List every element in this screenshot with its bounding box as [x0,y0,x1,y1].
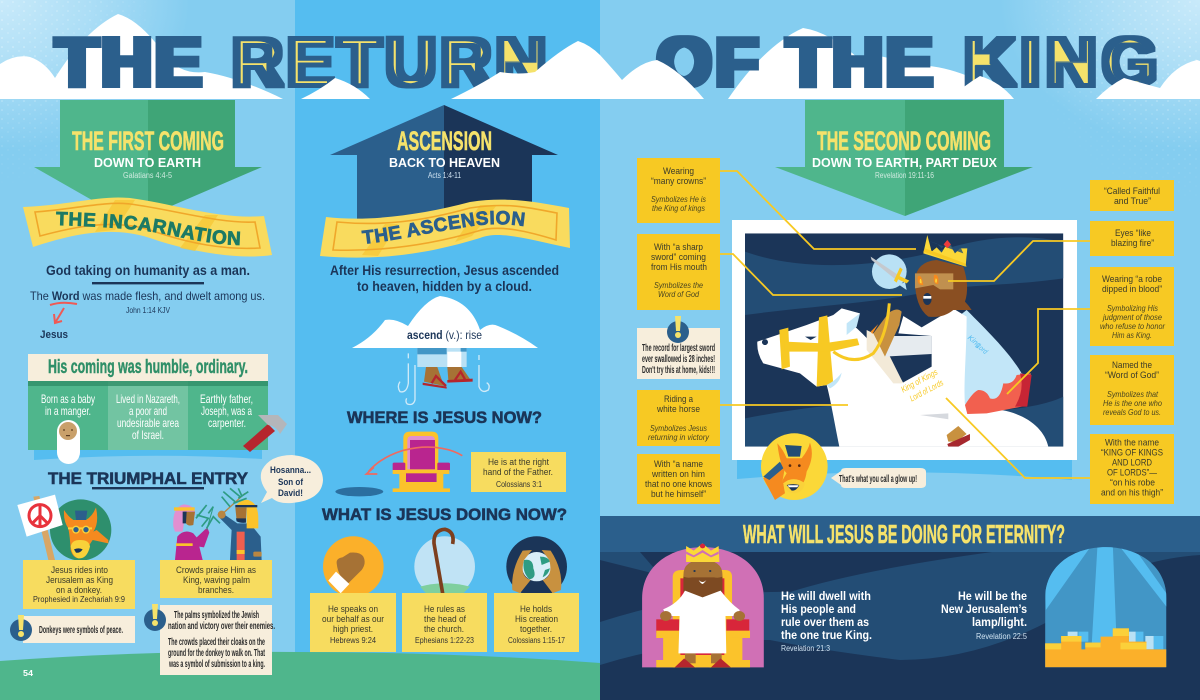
arrow: green down arrow [34,100,262,232]
callout: sharp sword: Word of God [658,289,699,299]
callout: king of kings: “on his robe [1110,478,1155,488]
callout: robe dipped in blood: dipped in blood” [1102,284,1162,295]
text: after his resurrection: to heaven, hidden by a cloud. [357,278,532,294]
text: dwell with his people: His people and [781,604,856,616]
callout: white horse [637,390,720,446]
panel: first coming [10,100,287,678]
arrow: navy up arrow [330,105,558,230]
illustration: jesus on white horse: Lord [975,341,990,356]
illustration: jesus on white horse [745,233,1063,500]
note: donkeys symbols of peace: Donkeys were symbols of peace. [39,625,123,636]
note: largest sword swallowed [637,316,720,379]
callout: king of kings: and on his thigh” [1101,488,1163,498]
text: new jerusalem lamp: lamp/light. [972,617,1027,629]
title: OF [657,23,762,101]
panel: second coming [637,100,1174,504]
text box: holds creation [494,593,579,652]
frame: white picture frame [732,220,1077,460]
ribbon: the ascension [320,200,570,258]
note: palms symbolized: nation and victory over their enemies. [168,621,275,632]
subheading: back to heaven: BACK TO HEAVEN [389,155,500,170]
reference: revelation: Revelation 19:11-16 [875,171,934,180]
dark background with waves [600,516,1200,700]
callout: faithful and true: and True” [1114,196,1151,207]
callout: many crowns: Wearing [663,166,694,177]
callout: white horse: returning in victory [648,432,710,442]
text box: head of the church: He rules as [424,604,465,615]
callout: many crowns: the King of kings [652,203,706,213]
text: dwell with his people [781,591,872,653]
callout: sharp sword: Symbolizes the [654,280,703,290]
text box: jesus rides into jerusalem: Jesus rides into [51,565,108,576]
text: god taking on humanity: God taking on humanity as a man. [46,262,250,278]
ribbon: the ascension: THE ASCENSION [361,210,525,244]
callout: many crowns: Symbolizes He is [651,194,707,204]
callout: word of god: He is the one who [1103,398,1162,408]
note: donkeys symbols of peace [10,615,135,643]
callout: robe dipped in blood: Symbolizing His [1107,303,1159,313]
text: new jerusalem lamp: Revelation 22:5 [976,632,1028,641]
text box: crowds praise him [160,560,272,598]
note: largest sword swallowed: The record for largest sword [642,343,715,354]
reference: john: John 1:14 KJV [126,306,171,315]
heading: the second coming: THE SECOND COMING [817,126,991,156]
label: jesus: Jesus [40,329,68,341]
panel: three humble facts: of Israel. [132,428,164,442]
ribbon: the incarnation: THE INCARNATION [56,212,240,246]
speech bubble: glow up [831,468,926,488]
callout: a name written: written on him [651,469,705,480]
clouds behind title [0,14,1013,99]
callout: sharp sword: With “a sharp [654,242,703,253]
icon: baby [57,420,80,464]
illustration: jesus on white horse: King of Kings [899,367,940,394]
text box: head of the church: the church. [424,624,464,635]
text: after his resurrection [330,262,559,294]
text box: crowds praise him: King, waving palm [183,575,250,586]
title: THE [787,23,936,101]
subheading: down to earth: DOWN TO EARTH [94,155,201,170]
callout: king of kings: “KING OF KINGS [1101,448,1163,458]
banner: humble ordinary: His coming was humble, ordinary. [48,357,248,378]
text box: high priest: high priest. [333,624,373,635]
callout: word of god [1090,355,1174,425]
panel: three humble facts: Lived in Nazareth, [116,392,180,406]
illustration: jesus on white horse: Lord of Lords [908,377,945,403]
callout: robe dipped in blood [1090,267,1174,346]
icon: small donkey [761,433,828,500]
callout: a name written [637,454,720,504]
callout: word of god: Named the [1112,360,1152,371]
text box: jesus rides into jerusalem [23,560,135,609]
speech bubble: hosanna [261,455,323,503]
banner: humble ordinary [28,354,268,381]
text: new jerusalem lamp [941,591,1028,641]
icon: throne with arrow [335,432,462,496]
illustration: feet below cloud [398,348,489,404]
note: palms symbolized: ground for the donkey to walk on. That [168,648,265,659]
blue shadow under frame [737,460,1072,480]
callout: robe dipped in blood: Wearing “a robe [1102,274,1162,285]
callout: word of god: “Word of God” [1105,370,1159,381]
text box: head of the church: Ephesians 1:22-23 [415,636,474,645]
panel: ascension [260,105,579,652]
callout: white horse: white horse [656,404,700,415]
panel: three humble facts: Born as a baby [41,392,95,406]
callout: many crowns [637,158,720,223]
speech bubble: hosanna: David! [278,488,303,498]
callout: king of kings: With the name [1105,438,1159,448]
text box: crowds praise him: Crowds praise Him as [176,565,256,576]
text box: holds creation: His creation [515,614,558,625]
arrow: red word to jesus [50,303,77,323]
title: THE [56,23,205,101]
cloud: ascend definition: ascend (v.): rise [407,328,482,342]
heading: ascension: ASCENSION [397,126,492,156]
text box: high priest: our behalf as our [322,614,384,625]
illustration: jesus on throne [642,543,764,667]
verse: the word: The Word was made flesh, and dwelt among us. [30,289,265,303]
text box: holds creation: He holds [520,604,552,615]
text box: right hand of father: hand of the Father. [483,467,553,478]
callout: blazing fire: Eyes “like [1115,228,1151,239]
panel: three humble facts: a poor and [129,404,167,418]
note: largest sword swallowed: ever swallowed is 28 inches! [642,354,715,365]
icon: donkey with peace sign [17,495,111,561]
panel: three humble facts: in a manger. [45,404,91,418]
text box: head of the church: the head of [424,614,466,625]
callout: king of kings: OF LORDS”— [1107,468,1157,478]
clouds in front of title [301,41,1200,99]
callout: blazing fire: blazing fire” [1111,238,1154,249]
callout: white horse: Symbolizes Jesus [650,423,708,433]
text box: head of the church [402,593,487,652]
callout: king of kings [1090,434,1174,504]
heading: what is jesus doing now: WHAT IS JESUS DOING NOW? [322,505,567,524]
panel: three humble facts: carpenter. [208,416,246,430]
text: new jerusalem lamp: He will be the [958,591,1027,603]
text box: jesus rides into jerusalem: Prophesied in Zechariah 9:9 [33,595,126,604]
title [56,23,1163,101]
page number: 54 [23,668,33,678]
text: after his resurrection: After His resurrection, Jesus ascended [330,262,559,278]
arrow: green down arrow [775,100,1033,216]
illustration: crowd with palm branches [173,488,262,560]
panel: three humble facts: Earthly father, [200,392,253,406]
text box: holds creation: together. [520,624,552,635]
illustration: jesus on white horse: King [966,333,984,350]
text: dwell with his people: He will dwell with [781,591,871,603]
text box: jesus rides into jerusalem: Jerusalem as King [46,575,113,586]
speech bubble: hosanna: Son of [278,477,304,487]
icons: priest shepherd creator [323,529,567,597]
heading: the first coming: THE FIRST COMING [72,126,224,156]
panel: three humble facts: Joseph, was a [201,404,252,418]
callout: faithful and true: “Called Faithful [1104,186,1160,197]
title: KING [964,23,1163,101]
text: new jerusalem lamp: New Jerusalem’s [941,604,1027,616]
speech bubble: glow up: That's what you call a glow up! [839,474,917,485]
note: palms symbolized: was a symbol of submission to a king. [168,659,265,670]
note: palms symbolized: The palms symbolized the Jewish [174,610,259,621]
connector lines [720,171,1090,478]
title: RETURN [232,23,551,101]
callout: word of god: Symbolizes that [1107,389,1159,399]
callout: sharp sword: sword” coming [651,252,706,263]
panel: eternity [600,516,1200,700]
callout: king of kings: AND LORD [1112,458,1152,468]
heading: triumphal entry: THE TRIUMPHAL ENTRY [48,469,249,488]
speech bubble: hosanna: Hosanna... [270,465,311,475]
callout: robe dipped in blood: who refuse to honor [1100,321,1166,331]
heading: where is jesus now: WHERE IS JESUS NOW? [347,408,542,427]
text box: jesus rides into jerusalem: on a donkey. [56,585,102,596]
icon: hammer [243,415,287,452]
text box: right hand of father: He is at the right [488,457,549,468]
panel: three humble facts: undesirable area [117,416,179,430]
blue shadow band [34,450,262,460]
text box: holds creation: Colossians 1:15-17 [508,636,565,645]
illustration: new jerusalem [1045,543,1166,667]
text box: high priest: Hebrews 9:24 [330,636,377,645]
panel: three humble facts [28,381,268,450]
text: dwell with his people: Revelation 21:3 [781,644,830,653]
note: palms symbolized: The crowds placed their cloaks on the [168,637,265,648]
callout: word of god: reveals God to us. [1103,407,1161,417]
callout: robe dipped in blood: judgment of those [1102,312,1162,322]
subheading: part deux: DOWN TO EARTH, PART DEUX [812,155,997,170]
callout: a name written: but he himself” [651,489,706,500]
callout: a name written: With “a name [654,459,703,470]
reference: acts: Acts 1:4-11 [428,171,461,180]
reference: galatians: Galatians 4:4-5 [123,171,172,180]
callout: white horse: Riding a [664,394,694,405]
callout: a name written: that no one knows [645,479,712,490]
callout: blazing fire [1090,221,1174,256]
cloud: ascend definition [352,296,538,348]
ribbon: the incarnation [23,198,272,256]
note: palms symbolized [144,604,275,675]
text box: high priest: He speaks on [328,604,378,615]
callout: faithful and true [1090,180,1174,211]
note: largest sword swallowed: Don't try this at home, kids!!! [642,365,715,376]
text box: right hand of father: Colossians 3:1 [496,480,542,489]
text: dwell with his people: rule over them as [781,617,869,629]
callout: robe dipped in blood: Him as King. [1112,330,1152,340]
text box: crowds praise him: branches. [198,585,234,596]
callout: many crowns: “many crowns” [651,176,706,187]
text: dwell with his people: the one true King. [781,630,872,642]
callout: sharp sword: from His mouth [651,262,707,273]
text box: right hand of father [471,452,566,492]
text box: high priest [310,593,396,652]
callout: sharp sword [637,234,720,310]
